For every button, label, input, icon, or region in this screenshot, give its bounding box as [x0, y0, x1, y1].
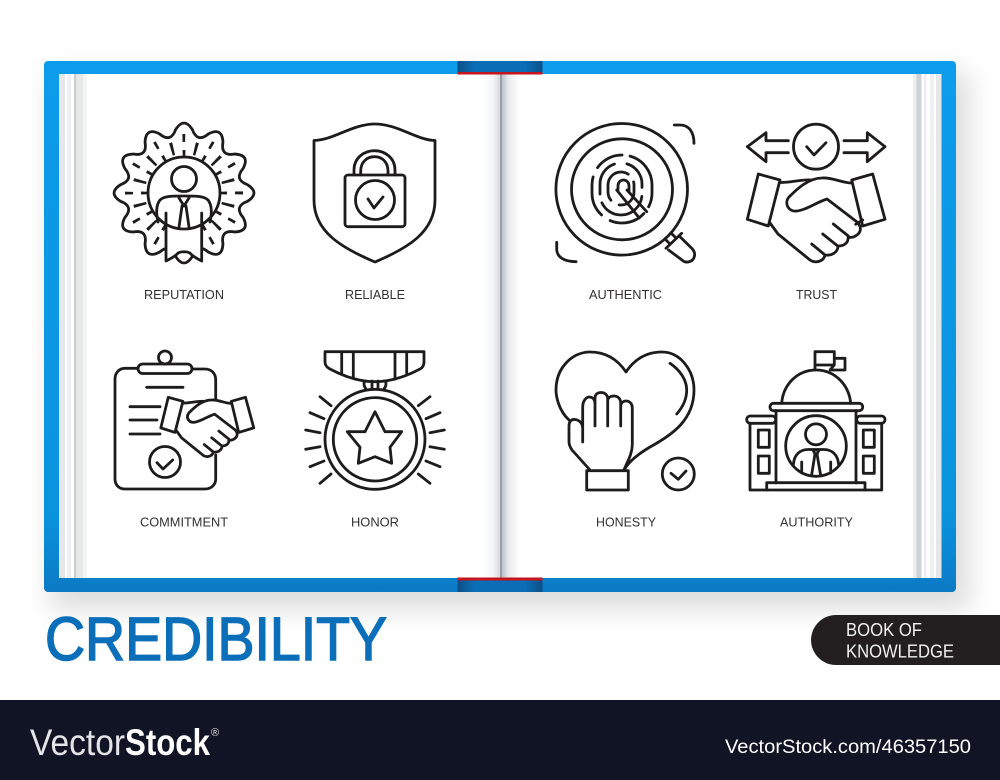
footer bar: ®: [211, 727, 219, 739]
label: honor: HONOR: [351, 514, 399, 530]
icon: authority capitol building: [747, 352, 885, 490]
panel: open book: [44, 61, 970, 610]
left page stack edges: [59, 74, 87, 578]
icon: reputation: [114, 123, 254, 263]
book cover: [44, 61, 956, 592]
label: commitment: COMMITMENT: [140, 514, 228, 530]
icon: honesty heart and hand: [556, 352, 694, 490]
label: trust: TRUST: [796, 287, 837, 302]
icon: commitment clipboard: [115, 351, 254, 489]
icon: reliable shield with padlock: [314, 124, 435, 262]
badge: book of knowledge: [811, 615, 1000, 665]
centre gutter: [482, 74, 520, 578]
label: authentic: AUTHENTIC: [589, 287, 662, 302]
icon: honor medal: [306, 352, 444, 489]
right page stack edges: [913, 74, 942, 578]
footer image id: VectorStock.com/46357150: [725, 737, 971, 758]
icon: authentic fingerprint magnifier: [556, 124, 695, 262]
icon: trust handshake with arrows: [747, 124, 885, 262]
badge: book of knowledge: BOOK OF: [846, 620, 922, 640]
footer bar: Stock: [125, 722, 210, 763]
spine top: [458, 61, 542, 74]
footer logo: Vector: [30, 722, 125, 763]
label: authority: AUTHORITY: [780, 514, 853, 530]
title: CREDIBILITY: [45, 605, 387, 673]
spine bottom: [458, 578, 542, 592]
badge: book of knowledge: KNOWLEDGE: [846, 642, 954, 662]
label: reliable: RELIABLE: [345, 287, 405, 302]
book shadow: [50, 72, 970, 610]
footer bar: [0, 700, 1000, 780]
left page: [59, 74, 500, 578]
label: reputation: REPUTATION: [144, 287, 224, 302]
label: honesty: HONESTY: [596, 514, 656, 530]
right page: [500, 74, 942, 578]
